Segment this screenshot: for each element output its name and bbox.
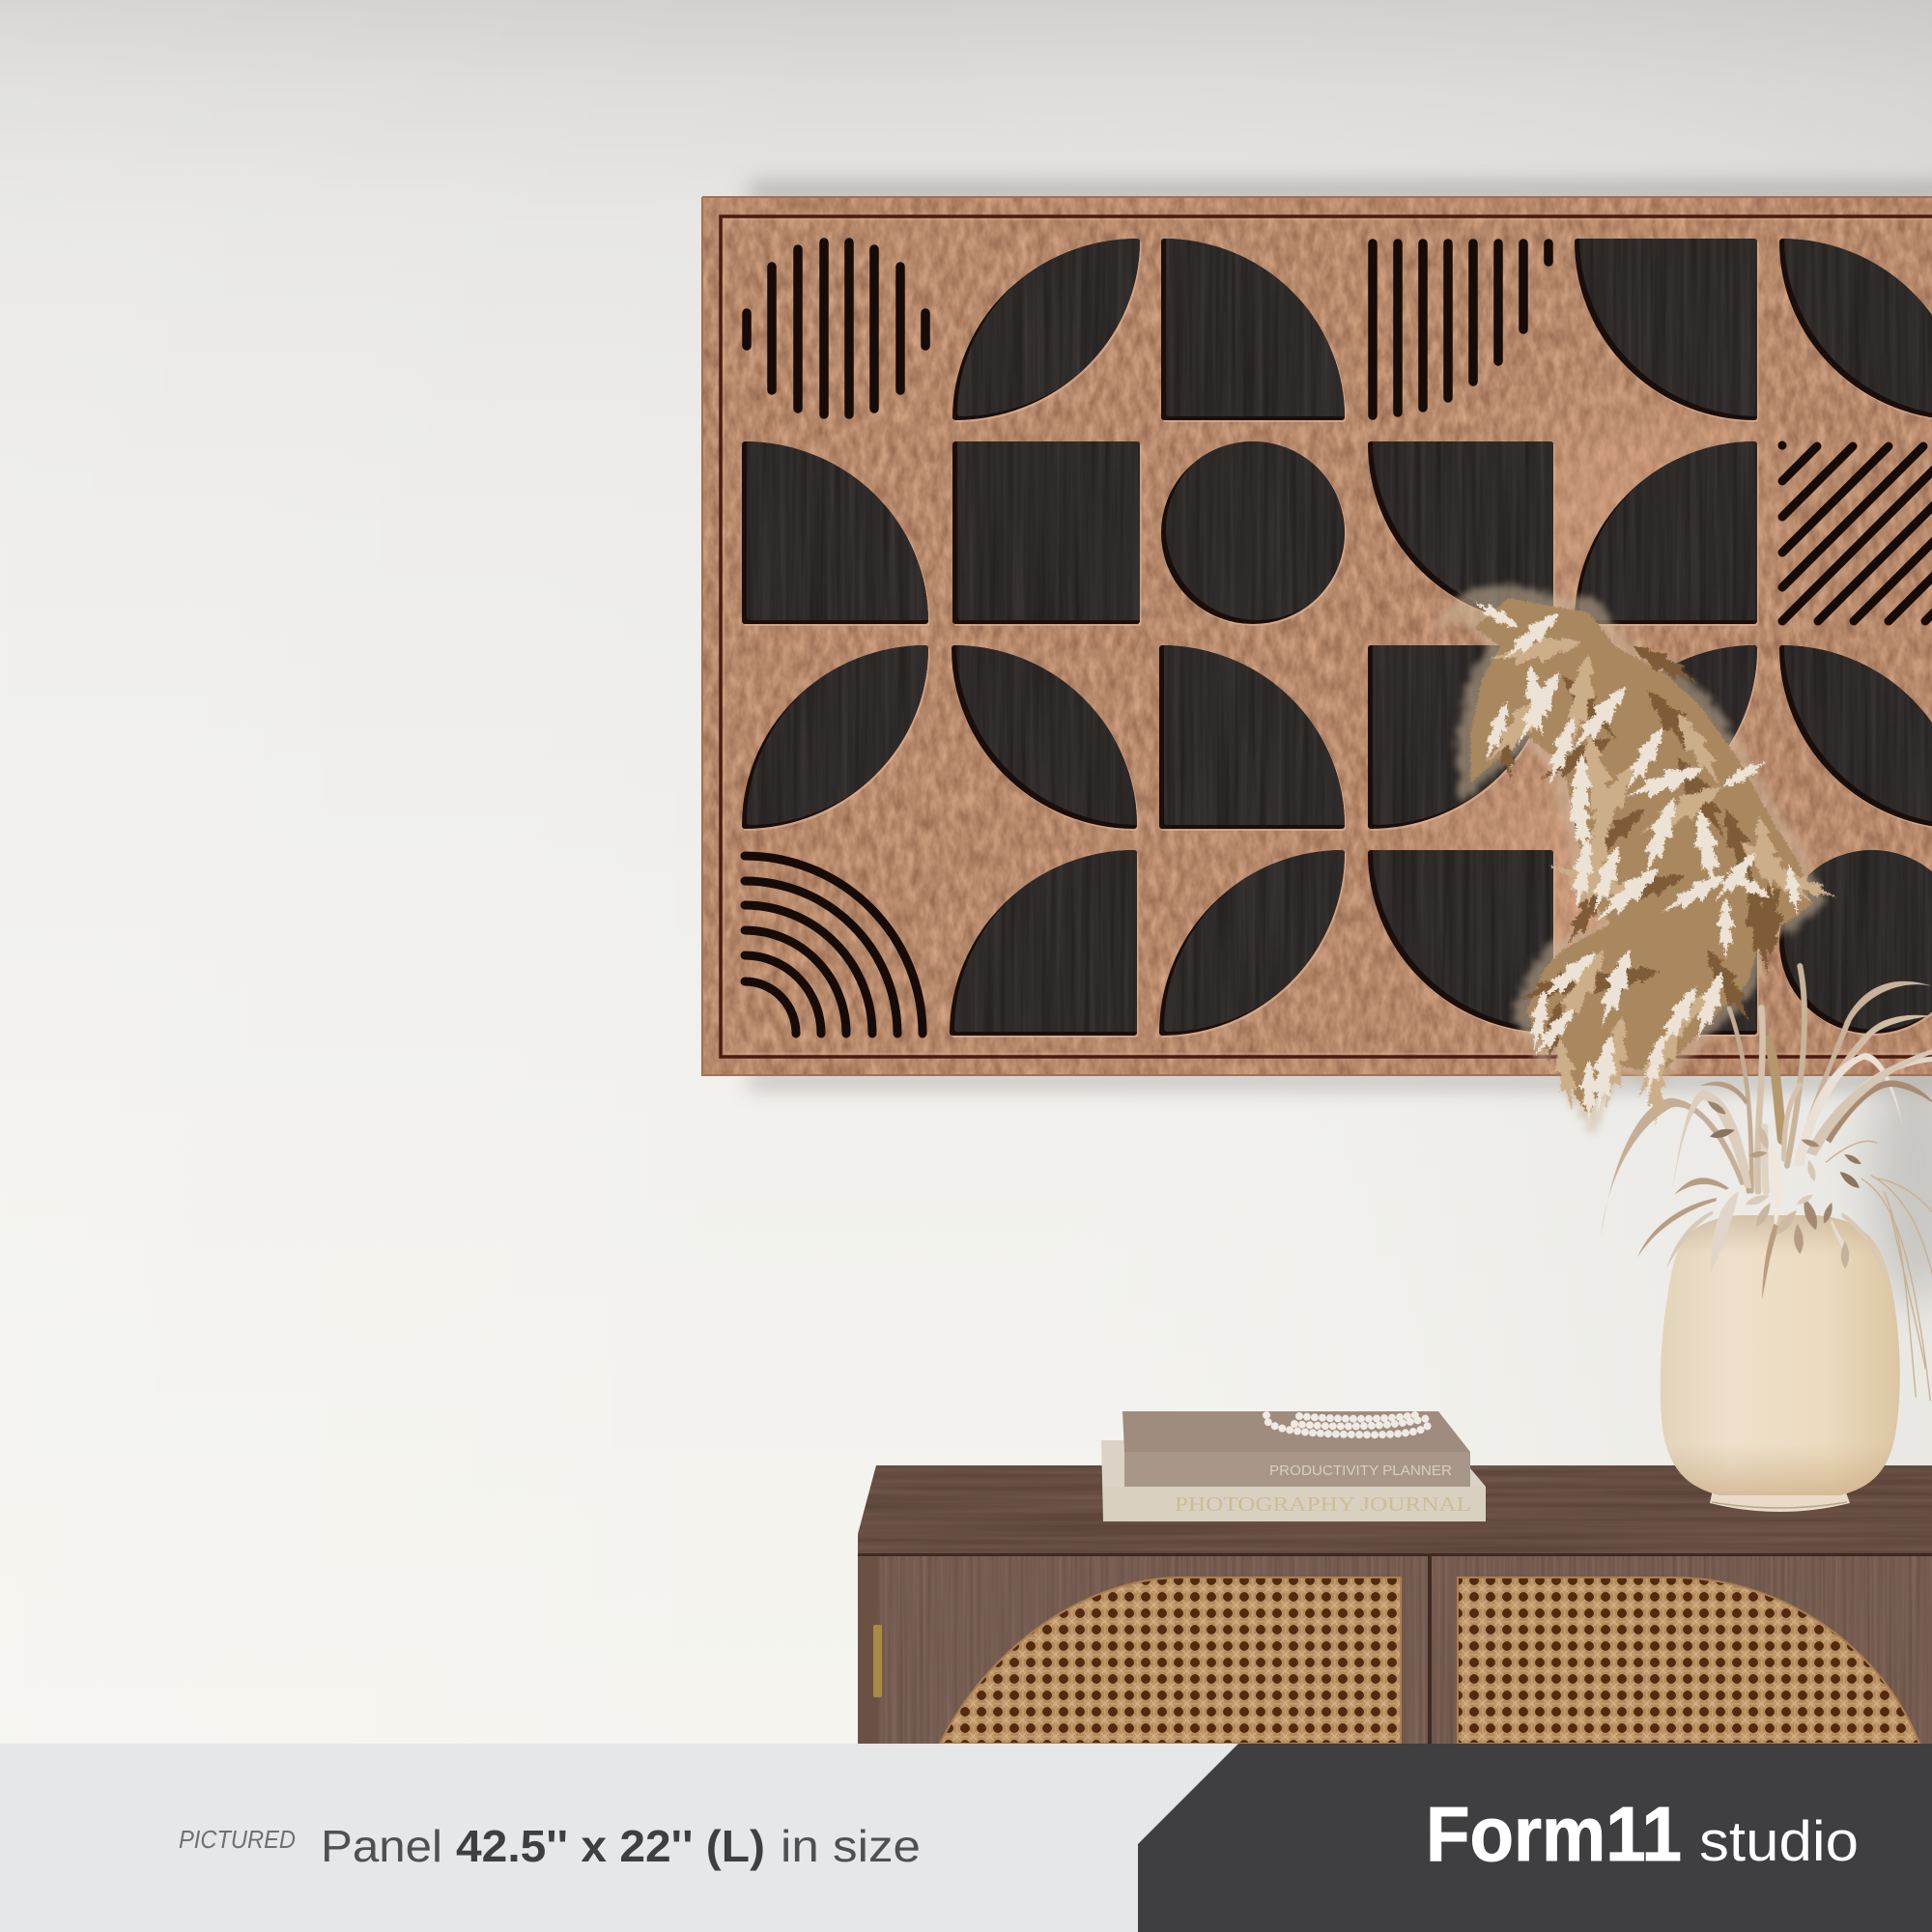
feather clusters: [1469, 595, 1840, 1126]
light patch on wood: [1449, 367, 1816, 638]
upper book: [1122, 1411, 1470, 1487]
right door: [1432, 1556, 1932, 1744]
wooden wall panel: [702, 197, 1932, 1082]
cream feathers: [1469, 595, 1805, 1123]
panel board: [702, 197, 1932, 1075]
right cane panel: [1458, 1577, 1919, 1744]
frame edge: [702, 197, 1932, 1075]
sideboard front edge: [858, 1534, 1932, 1554]
stacked books: [1101, 1411, 1486, 1521]
pampas grass plume: [1432, 583, 1840, 1138]
ceramic vase: [1661, 1215, 1900, 1512]
caption text: [179, 1821, 921, 1871]
fine hair wisps: [1826, 1141, 1932, 1401]
left cane panel: [940, 1577, 1401, 1744]
bead necklace: [1266, 1414, 1428, 1435]
small leaves: [1706, 1098, 1862, 1268]
diagonal slots: [1782, 442, 1932, 621]
wall shadow of plant: [1869, 1053, 1932, 1304]
lower book: [1101, 1440, 1486, 1521]
sideboard: [858, 1465, 1932, 1744]
brass hinge: [873, 1625, 882, 1697]
long blades: [1601, 981, 1932, 1301]
logo word: Form11: Form11: [1426, 1791, 1682, 1877]
vase foot: [1710, 1490, 1850, 1512]
row 4 shapes: [952, 853, 1932, 1033]
second light patch on wood: [1391, 696, 1777, 1082]
size: panel: Panel: [321, 1821, 442, 1871]
concentric arc slots: [745, 856, 923, 1034]
label: pictured: PICTURED: [179, 1825, 296, 1854]
left door: [878, 1556, 1428, 1744]
sideboard body: [858, 1554, 1932, 1744]
size: dimensions: 42.5'' x 22'' (L): [456, 1821, 765, 1871]
sideboard top surface: [858, 1465, 1932, 1534]
upper book title: PRODUCTIVITY PLANNER: [1269, 1463, 1452, 1479]
row 2 shapes: [745, 444, 1754, 621]
vertical slot staircase: [1373, 243, 1548, 415]
vase body: [1661, 1215, 1900, 1495]
vase shading: [1661, 1215, 1900, 1495]
logo: Form11 studio: [1426, 1791, 1859, 1877]
row 1 shapes: [955, 242, 1932, 417]
under-top shadow: [858, 1553, 1932, 1556]
wall shadow behind panel: [749, 182, 1932, 1090]
mid tan feathers: [1477, 629, 1840, 1126]
size: in size: in size: [781, 1821, 921, 1871]
brand band: [1138, 1744, 1932, 1932]
inset frame groove: [721, 216, 1932, 1057]
caption band: [0, 1744, 1932, 1932]
logo word: studio: studio: [1699, 1810, 1859, 1873]
plume base mass: [1470, 598, 1811, 1116]
door gap: [1428, 1556, 1432, 1744]
lower book title: PHOTOGRAPHY JOURNAL: [1175, 1492, 1471, 1516]
dark recessed shapes: [745, 242, 1932, 1033]
stalks: [1729, 966, 1804, 1191]
vertical slot diamond: [747, 242, 925, 414]
dried grass and leaves: [1601, 966, 1932, 1401]
plume soft halo: [1432, 583, 1826, 1138]
brown feathers: [1492, 637, 1784, 1065]
row 3 shapes: [745, 648, 1932, 826]
